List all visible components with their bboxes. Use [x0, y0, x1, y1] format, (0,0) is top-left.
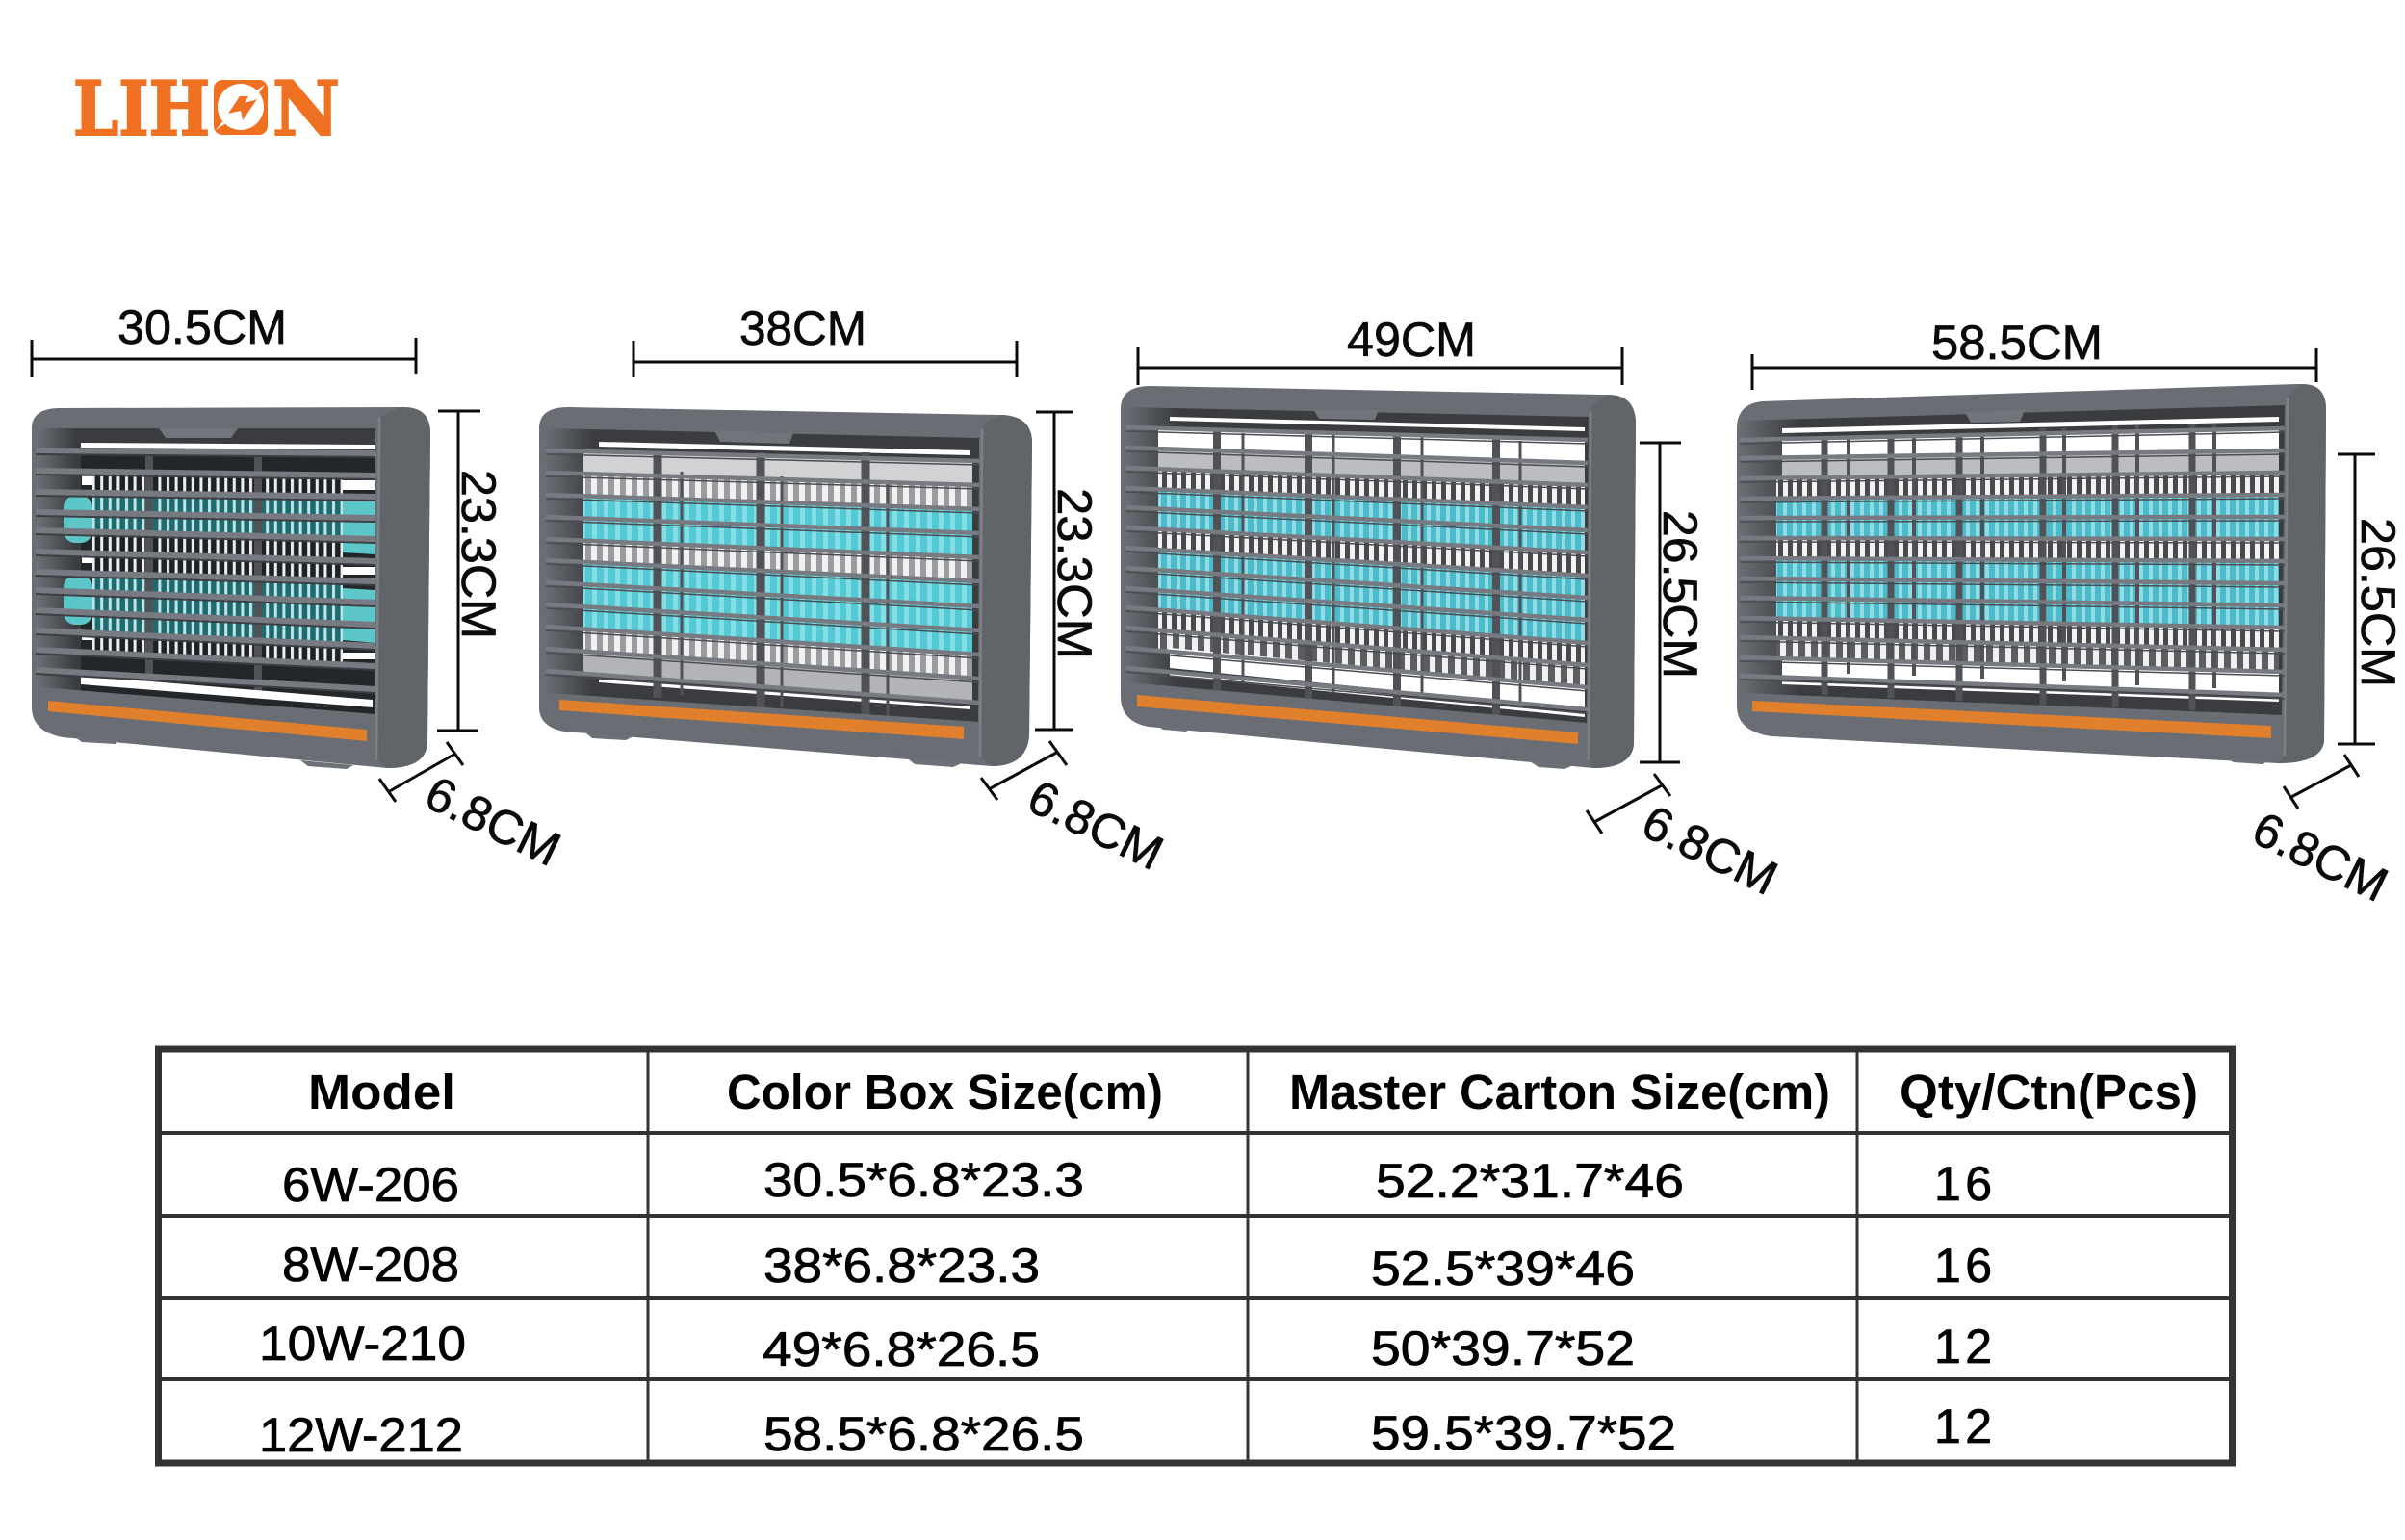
dark interior — [81, 450, 375, 714]
table: model sizes — [158, 1049, 2233, 1463]
opening — [39, 428, 375, 714]
dimension: 58.5CM width: 58.5CM — [1931, 316, 2103, 370]
dimension: 6.8CM depth — [379, 742, 569, 877]
logo icon: lightning O — [214, 80, 268, 135]
device body — [1737, 384, 2326, 763]
dimension: 6.8CM depth — [1587, 774, 1786, 906]
UV tube ends — [64, 496, 375, 643]
dimension: 23.3CM height: 23.3CM — [452, 470, 505, 639]
bottom white strip — [81, 676, 373, 707]
table header: Color Box Size(cm) — [727, 1065, 1163, 1119]
frame rim — [2285, 398, 2288, 756]
louver slats — [546, 450, 979, 703]
device side — [1589, 395, 1636, 768]
device body — [539, 407, 1032, 766]
row: 6W-206: 6W-206 — [282, 1158, 459, 1212]
row: 10W-210: 49*6.8*26.5 — [763, 1322, 1040, 1376]
row: 12W-212: 12W-212 — [259, 1408, 463, 1462]
top white strip — [81, 443, 375, 449]
dimension: 49CM width: 49CM — [1347, 313, 1476, 367]
top white strip — [1170, 417, 1585, 431]
row: 12W-212 — [259, 1399, 1992, 1462]
dividers — [149, 452, 258, 698]
row: 10W-210: 10W-210 — [259, 1317, 466, 1371]
white gaps — [82, 475, 375, 659]
device body — [32, 407, 430, 768]
orange bar — [48, 701, 367, 741]
dimension: 26.5CM height — [1640, 443, 1707, 762]
dimension: 30.5CM width — [32, 300, 416, 377]
table header: Master Carton Size(cm) — [1289, 1065, 1830, 1119]
dimension: 26.5CM height: 26.5CM — [1653, 510, 1707, 679]
opening — [1740, 405, 2285, 715]
dividers — [1824, 424, 2192, 710]
panel: device 8W — [539, 407, 1032, 767]
opening — [1125, 407, 1589, 723]
device side — [377, 407, 430, 768]
dimension: 6.8CM depth: 6.8CM — [417, 766, 569, 877]
device side — [980, 415, 1032, 766]
logo letter N: N — [272, 65, 340, 153]
dimension: 6.8CM depth — [2244, 755, 2396, 912]
interior rows — [1776, 428, 2285, 702]
dimension: 38CM width: 38CM — [739, 301, 866, 355]
top tab — [1965, 410, 2025, 423]
top tab — [159, 428, 238, 438]
opening — [546, 428, 979, 722]
louver shade — [546, 454, 979, 706]
row: 6W-206: 30.5*6.8*23.3 — [763, 1153, 1084, 1207]
frame rim — [1589, 412, 1590, 760]
logo: LIHON — [73, 65, 340, 153]
row: 6W-206: 16 — [1934, 1157, 1992, 1211]
row: 12W-212: 12 — [1934, 1399, 1992, 1453]
table grid — [158, 1049, 2233, 1463]
top white strip — [599, 442, 970, 455]
dimension: 23.3CM height: 23.3CM — [1047, 488, 1101, 659]
lower frame panel — [1126, 682, 1589, 760]
interior rows — [583, 453, 972, 709]
feet — [585, 732, 964, 767]
dimension: 49CM width — [1138, 313, 1622, 385]
lower frame panel — [40, 687, 376, 760]
interior rows — [1125, 427, 1588, 717]
device side — [2278, 384, 2326, 763]
feet — [1771, 731, 2269, 764]
dividers — [1217, 428, 1496, 720]
dimension: 30.5CM width: 30.5CM — [117, 300, 287, 354]
louver slats — [1125, 427, 1588, 709]
dimension: 6.8CM depth: 6.8CM — [1634, 795, 1786, 906]
logo letters LIH: LIH — [73, 65, 210, 153]
feet — [75, 737, 353, 769]
dimension: 6.8CM depth: 6.8CM — [1020, 770, 1172, 881]
row: 8W-208: 8W-208 — [282, 1238, 459, 1292]
row: 12W-212: 59.5*39.7*52 — [1371, 1406, 1676, 1460]
dimension: 23.3CM height — [1035, 412, 1101, 730]
row: 8W-208 — [282, 1238, 1992, 1296]
orange bar — [1752, 701, 2271, 738]
top tab — [1313, 409, 1379, 420]
dimension: 23.3CM height — [437, 411, 505, 731]
row: 8W-208: 16 — [1934, 1239, 1992, 1293]
dimension: 6.8CM depth: 6.8CM — [2244, 802, 2396, 912]
lower frame panel — [1741, 693, 2285, 756]
dimension: 58.5CM width — [1752, 316, 2316, 390]
louver slats — [1740, 428, 2285, 695]
panel: device 10W — [1121, 386, 1636, 769]
dividers — [658, 452, 866, 717]
row: 6W-206 — [282, 1153, 1992, 1212]
table header: Model — [308, 1065, 455, 1119]
row: 8W-208: 38*6.8*23.3 — [763, 1239, 1040, 1293]
louver slats — [36, 450, 375, 689]
louver shade — [1740, 432, 2285, 699]
top white strip — [1782, 417, 2279, 433]
lower frame panel — [547, 693, 980, 757]
table header — [308, 1065, 2198, 1119]
top tab — [714, 430, 793, 444]
orange bar — [559, 700, 964, 739]
orange bar — [1137, 695, 1578, 744]
dimension: 6.8CM depth — [981, 741, 1172, 881]
feet — [1156, 725, 1573, 769]
row: 8W-208: 52.5*39*46 — [1371, 1242, 1635, 1296]
dimension: 38CM width — [634, 301, 1017, 377]
panel: device 6W — [32, 407, 430, 769]
frame rim — [376, 418, 379, 760]
louver shade — [36, 454, 375, 693]
panel: device 12W — [1737, 384, 2326, 764]
dimension: 26.5CM height — [2338, 454, 2405, 744]
dimension: 26.5CM height: 26.5CM — [2351, 518, 2405, 687]
table header: Qty/Ctn(Pcs) — [1900, 1065, 2198, 1119]
row: 12W-212: 58.5*6.8*26.5 — [763, 1407, 1084, 1461]
device body — [1121, 386, 1636, 768]
louver shade — [1125, 431, 1588, 713]
row: 10W-210: 50*39.7*52 — [1371, 1322, 1635, 1375]
electrode rows — [92, 474, 343, 662]
row: 10W-210: 12 — [1934, 1320, 1992, 1373]
row: 10W-210 — [259, 1317, 1992, 1376]
frame rim — [980, 429, 982, 757]
row: 6W-206: 52.2*31.7*46 — [1376, 1154, 1684, 1208]
